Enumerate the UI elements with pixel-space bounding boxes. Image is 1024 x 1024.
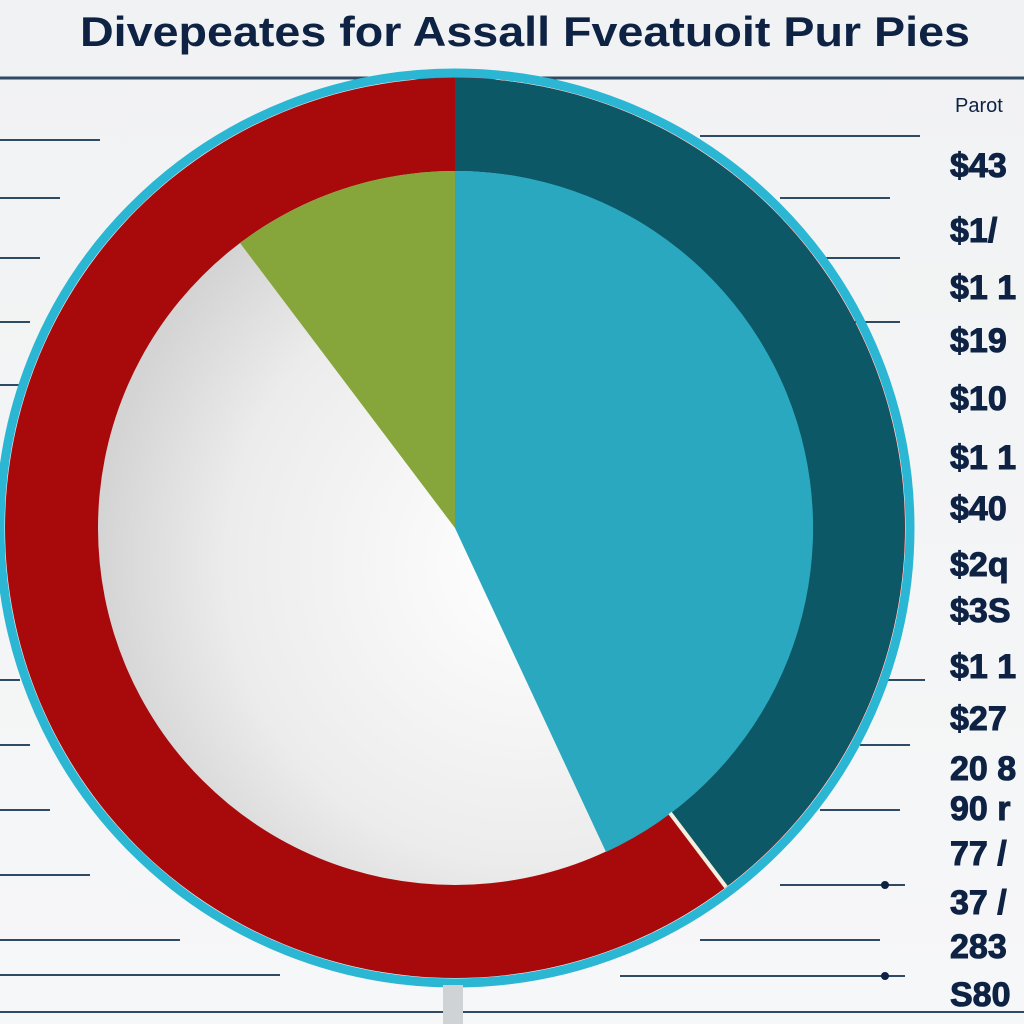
inner pie: gray [98, 171, 812, 885]
legend values: $3S [950, 592, 1010, 630]
ring segment: dark teal [455, 78, 905, 887]
legend values: $1 1 [950, 648, 1016, 686]
ring segment: red [5, 78, 905, 978]
legend values: $10 [950, 380, 1007, 418]
legend values: 37 / [950, 884, 1007, 922]
legend values: Parot [955, 95, 1003, 117]
legend values: $19 [950, 322, 1007, 360]
inner pie: cyan wedge [455, 171, 813, 852]
legend values [950, 95, 1016, 1014]
title: Divepeates for Assall Fveatuoit Pur Pies [80, 8, 970, 55]
legend values: S80 [950, 976, 1010, 1014]
legend values: $2q [950, 546, 1009, 584]
legend values: 90 r [950, 790, 1010, 828]
legend values: 283 [950, 928, 1007, 966]
legend values: $27 [950, 700, 1007, 738]
outer cyan rim [0, 73, 910, 983]
bullet dots [881, 881, 889, 980]
legend values: $43 [950, 147, 1007, 185]
stand [443, 985, 463, 1024]
legend values: 77 / [950, 835, 1007, 873]
legend values: 20 8 [950, 750, 1016, 788]
inner pie: green wedge [240, 171, 455, 528]
legend values: $1/ [950, 212, 998, 250]
legend values: $40 [950, 490, 1007, 528]
legend values: $1 1 [950, 439, 1016, 477]
legend values: $1 1 [950, 269, 1016, 307]
